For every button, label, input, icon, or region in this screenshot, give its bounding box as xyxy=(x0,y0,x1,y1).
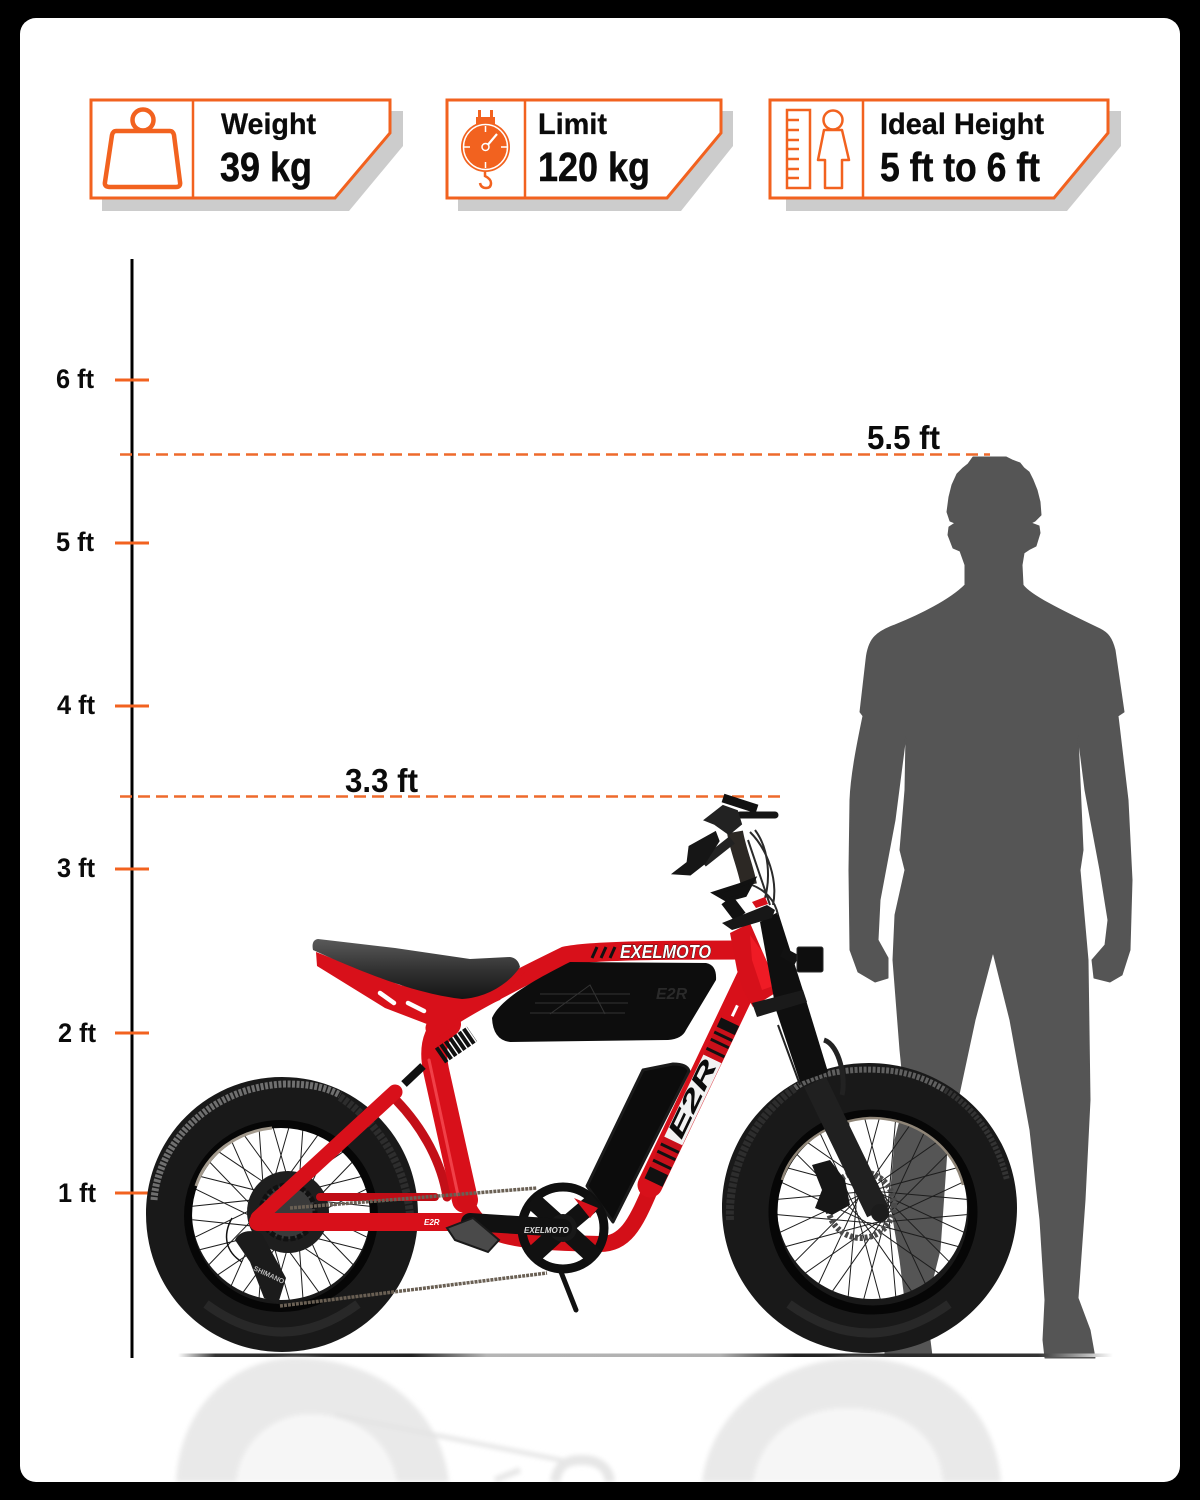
down tube xyxy=(650,975,750,1185)
chainring and crank xyxy=(447,1187,604,1310)
icon: ruler and person xyxy=(787,110,849,188)
derailleur xyxy=(235,1231,286,1304)
tick 1 ft: 1 ft xyxy=(58,1178,96,1208)
rear wheel: SHIMANO xyxy=(252,1265,286,1286)
kickstand xyxy=(561,1272,576,1310)
icon: hanging scale xyxy=(461,110,510,188)
fork clamp xyxy=(752,990,807,1017)
seat xyxy=(313,939,520,999)
person silhouette xyxy=(849,457,1132,1358)
chain upper and lower xyxy=(280,1188,547,1306)
stat card: ideal height xyxy=(770,100,1121,211)
tick 1 ft xyxy=(58,1178,149,1208)
riser xyxy=(735,832,749,885)
tick 2 ft: 2 ft xyxy=(58,1018,96,1048)
tick 5 ft: 5 ft xyxy=(56,527,94,557)
brake cables xyxy=(748,830,778,915)
display xyxy=(675,833,718,874)
value: 120 kg: 120 kg xyxy=(538,144,650,190)
thin rear strut xyxy=(320,1193,435,1201)
chain stay xyxy=(258,1213,468,1231)
ground shadow xyxy=(178,1354,1113,1357)
grip xyxy=(705,806,741,834)
brake rotor xyxy=(828,1172,894,1238)
bar xyxy=(723,798,757,809)
tick 4 ft: 4 ft xyxy=(57,690,95,720)
top tube xyxy=(435,950,745,1028)
icon: weight xyxy=(105,110,180,187)
value: 39 kg: 39 kg xyxy=(220,144,312,190)
tick 6 ft xyxy=(56,364,149,394)
label: ideal height: Ideal Height xyxy=(880,108,1044,141)
rear spokes xyxy=(192,1125,370,1301)
side battery xyxy=(587,1064,689,1222)
down tube graphic: E2R xyxy=(662,1054,723,1143)
fork and steering column xyxy=(752,912,878,1212)
seat tube xyxy=(434,1024,465,1200)
headlight xyxy=(782,947,823,972)
front spokes xyxy=(777,1112,967,1302)
handlebar and controls xyxy=(675,798,778,930)
seat frame xyxy=(316,952,525,1026)
arc stay xyxy=(396,1100,447,1197)
chainring and crank: EXELMOTO xyxy=(524,1226,570,1235)
bike height marker: 3.3 ft xyxy=(345,762,418,799)
tick 3 ft: 3 ft xyxy=(57,853,95,883)
front wheel xyxy=(722,1063,1017,1353)
label: limit: Limit xyxy=(538,108,607,141)
red frame tubes xyxy=(258,950,750,1244)
rear wheel xyxy=(146,1077,418,1352)
brake caliper xyxy=(812,1160,850,1215)
label: weight: Weight xyxy=(221,108,316,141)
tick 3 ft xyxy=(57,853,149,883)
lower bend to down tube xyxy=(465,1190,650,1244)
pedal xyxy=(447,1218,499,1252)
down tube graphic xyxy=(641,1000,750,1188)
tank cover xyxy=(492,962,716,1042)
e-bike xyxy=(146,798,1017,1353)
frame gusset xyxy=(730,923,780,1007)
height axis xyxy=(56,259,149,1358)
tick 5 ft xyxy=(56,527,149,557)
stem xyxy=(715,880,753,900)
brand lettering: EXELMOTO xyxy=(620,942,711,962)
stat card: limit xyxy=(447,100,733,211)
lower fork leg xyxy=(815,1082,878,1212)
seat mount holes xyxy=(380,993,424,1011)
rear hub and cassette xyxy=(247,1171,329,1253)
person height marker: 5.5 ft xyxy=(867,419,940,456)
value: 5 ft to 6 ft: 5 ft to 6 ft xyxy=(880,144,1040,190)
rear tyre xyxy=(146,1077,418,1352)
front tyre xyxy=(722,1063,1017,1353)
chain stay badge: E2R xyxy=(424,1218,440,1227)
seat stay xyxy=(258,1092,395,1218)
wheel reflections xyxy=(176,1358,1001,1482)
rear shock xyxy=(404,1034,472,1084)
tick 6 ft: 6 ft xyxy=(56,364,94,394)
stat card: weight xyxy=(91,100,403,211)
tick 2 ft xyxy=(58,1018,149,1048)
tank badge: E2R xyxy=(656,986,688,1003)
tick 4 ft xyxy=(57,690,149,720)
top fork clamp xyxy=(722,905,775,930)
